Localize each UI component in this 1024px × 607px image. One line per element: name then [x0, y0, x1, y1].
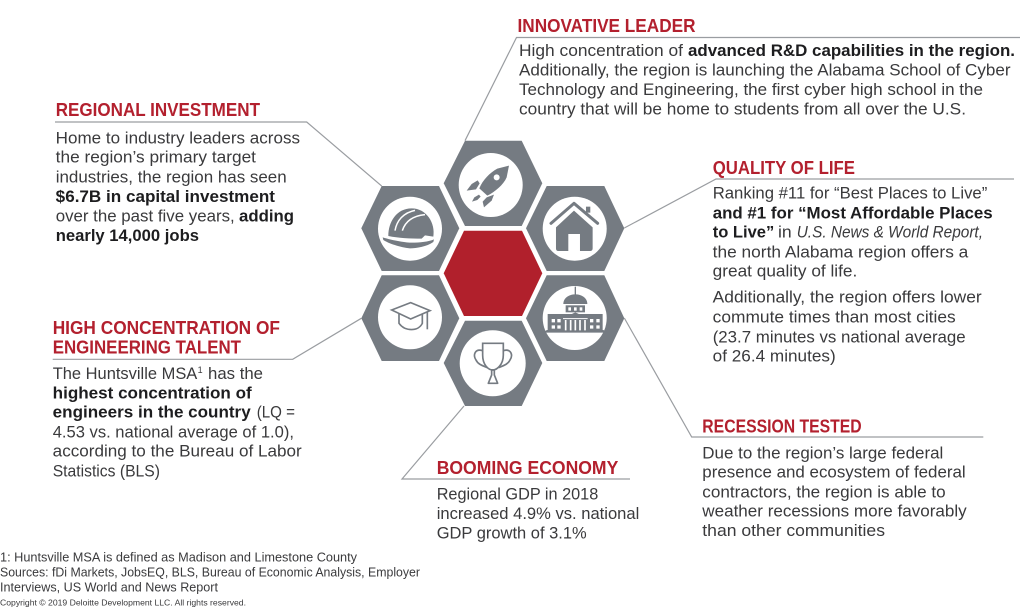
heading: high concentration of engineering talent: ENGINEERING TALENT [53, 336, 242, 357]
text block: recession tested: Due to the region’s large federal [702, 443, 943, 462]
heading: innovative leader: INNOVATIVE LEADER [518, 15, 696, 36]
hexagon cluster [361, 141, 624, 406]
text block: engineering talent: 1 [198, 365, 203, 375]
text block: quality of life: Ranking #11 for “Best Places to Live” [713, 183, 988, 202]
heading: high concentration of engineering talent: HIGH CONCENTRATION OF [53, 317, 280, 338]
hexagon: regional investment hard hat [361, 186, 459, 271]
text block: engineering talent: highest concentration of [53, 383, 252, 402]
footnote and sources: Sources: fDi Markets, JobsEQ, BLS, Bureau of Economic Analysis, Employer [0, 565, 421, 580]
text block: quality of life: (23.7 minutes vs national average [713, 327, 966, 346]
text block: regional investment [56, 128, 300, 245]
footnote and sources: Interviews, US World and News Report [0, 580, 218, 595]
text block: recession tested: than other communities [702, 521, 885, 540]
panel: recession tested [624, 318, 983, 540]
text block: recession tested: presence and ecosystem of federal [702, 463, 966, 482]
hexagon: recession tested capitol [526, 275, 624, 361]
panel: quality of life [624, 157, 1014, 366]
panel: regional investment [55, 99, 382, 245]
text block: quality of life: commute times than most cities [713, 308, 956, 327]
heading: quality of life: QUALITY OF LIFE [713, 157, 855, 178]
text block: regional investment: adding [239, 207, 294, 226]
text block: booming economy: Regional GDP in 2018 [437, 484, 598, 503]
text block: engineering talent [53, 364, 302, 481]
hexagon: quality of life house [526, 186, 624, 271]
text block: innovative leader [519, 41, 1015, 118]
text block: regional investment: Home to industry leaders across [56, 128, 300, 147]
panel: booming economy [402, 406, 639, 542]
text block: innovative leader: Technology and Engineering, the first cyber high school in the [519, 80, 983, 99]
footnote and sources: 1: Huntsville MSA is defined as Madison and Limestone County [0, 550, 357, 565]
text block: regional investment: the region’s primary target [56, 148, 256, 167]
hexagon: innovative leader rocket [444, 141, 542, 226]
text block: booming economy: increased 4.9% vs. national [437, 504, 639, 523]
text block: innovative leader: country that will be home to students from all over the U.S. [519, 100, 966, 118]
text block: booming economy [437, 484, 639, 542]
text block: regional investment: nearly 14,000 jobs [56, 226, 199, 245]
text block: engineering talent: 4.53 vs. national average of 1.0), [53, 422, 294, 441]
text block: innovative leader: Additionally, the region is launching the Alabama School of Cyber [519, 60, 1011, 80]
text block: engineering talent: (LQ = [257, 403, 295, 422]
heading: high concentration of engineering talent [53, 317, 280, 357]
text block: regional investment: over the past five years, [56, 207, 235, 226]
text block: quality of life: in [778, 223, 792, 242]
hexagon: engineering talent graduation cap [361, 275, 459, 361]
hexagon: booming economy trophy [444, 321, 542, 406]
center red hexagon [444, 231, 542, 316]
footnote and sources [0, 550, 421, 595]
text block: quality of life: to Live” [713, 223, 774, 242]
text block: innovative leader: High concentration of [519, 41, 683, 60]
text block: recession tested: contractors, the region is able to [702, 482, 946, 501]
heading: booming economy: BOOMING ECONOMY [437, 457, 619, 478]
text block: innovative leader: advanced R&D capabilities in the region. [688, 41, 1015, 60]
text block: regional investment: $6.7B in capital investment [56, 187, 275, 206]
text block: engineering talent: has the [208, 364, 263, 383]
text block: engineering talent: Statistics (BLS) [53, 462, 160, 481]
text block: quality of life: of 26.4 minutes) [713, 347, 836, 366]
text block: quality of life [713, 183, 993, 366]
text block: quality of life: the north Alabama region offers a [713, 242, 969, 261]
text block: quality of life: and #1 for “Most Affordable Places [713, 203, 993, 222]
text block: quality of life: Additionally, the region offers lower [713, 288, 982, 307]
text block: regional investment: industries, the region has seen [56, 167, 287, 186]
heading: regional investment: REGIONAL INVESTMENT [56, 99, 261, 120]
text block: booming economy: GDP growth of 3.1% [437, 523, 587, 542]
text block: recession tested: weather recessions more favorably [701, 502, 967, 521]
text block: engineering talent: according to the Bureau of Labor [53, 442, 302, 461]
text block: engineering talent: The Huntsville MSA [53, 364, 198, 383]
text block: engineering talent: engineers in the country [53, 403, 251, 422]
panel: high concentration of engineering talent [53, 317, 361, 481]
text block: quality of life: great quality of life. [713, 262, 857, 281]
text block: recession tested [701, 443, 967, 540]
text block: quality of life: U.S. News & World Report, [797, 223, 983, 242]
panel: innovative leader [465, 15, 1020, 141]
heading: recession tested: RECESSION TESTED [702, 415, 862, 436]
